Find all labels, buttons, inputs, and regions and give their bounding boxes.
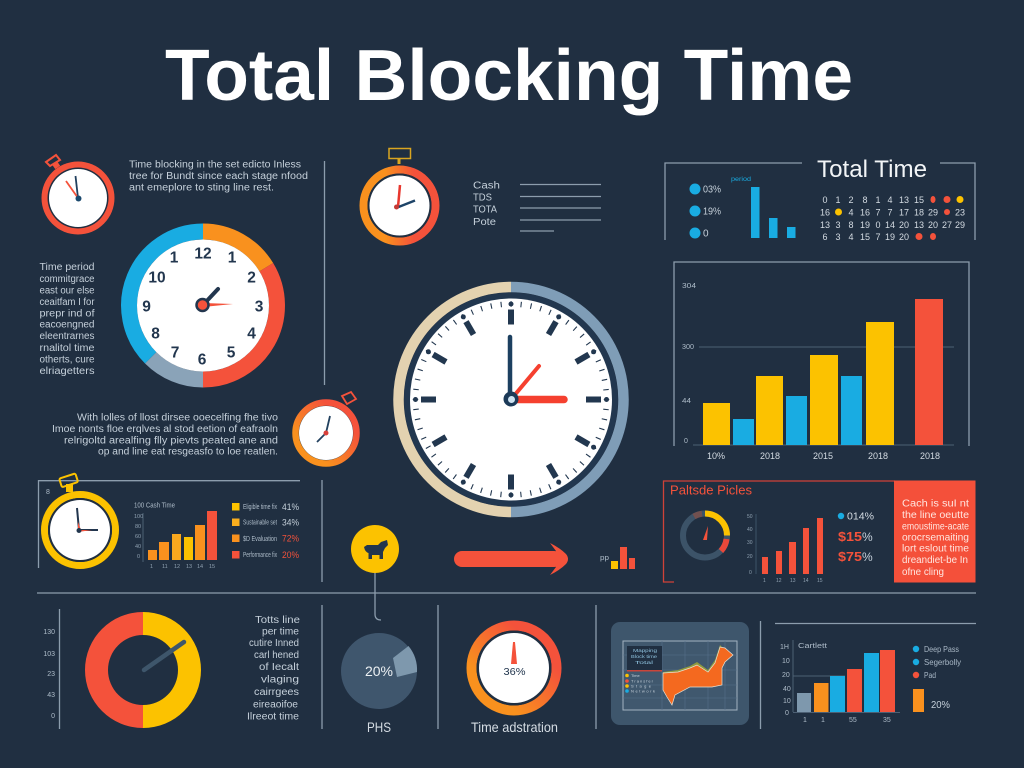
callout: red text box: Cach is suI nt [902,498,969,510]
number grid: 19 [860,220,870,230]
icon: bottom gauge clock [471,626,558,735]
chart: numbered clock with coloured ring: 2 [247,270,256,286]
bar chart: large yearly bars [674,262,969,461]
bar chart: blue bars [731,177,796,238]
legend: bottom chart: Segerbolly [924,658,961,667]
legend: label list with lines: Pote [473,217,496,228]
number grid: 6 [822,232,828,242]
number grid: 20 [899,232,909,242]
text block: bottom left column [247,615,300,722]
number grid: 4 [887,195,893,205]
number grid: 1 [835,195,841,205]
number grid: 13 [820,220,830,230]
bar chart: bottom right: 35 [883,717,891,724]
bar chart: mini time bars: 1 [150,564,153,570]
chart: numbered clock with coloured ring: 12 [194,246,212,262]
panel: yellow stopwatch with bars [38,473,322,582]
text block: left column: commitgrace [40,274,95,285]
legend: blue dots: 03% [703,184,721,196]
text block: bottom left column: vlaging [261,674,299,686]
text block: top left intro: ant emeplore to sting line rest. [129,182,274,194]
legend: mini chart percentages: 41% [282,502,299,512]
icon: small stopwatch [296,392,356,464]
text block: left column [40,262,95,377]
map legend box: Time [631,673,641,678]
bar chart: bottom right: Cartlett [798,643,827,650]
bar chart: large yearly bars: 300 [682,344,694,351]
chart: red and yellow donut gauge: 103 [43,651,55,658]
bar chart: red bars: 0 [749,570,752,576]
chart: red and yellow donut gauge: 43 [47,692,55,699]
panel: total time [665,156,975,242]
bar chart: red bars: 12 [776,578,782,584]
bar chart: blue bars: period [731,177,751,183]
legend: bottom chart: Pad [924,671,936,680]
vertical divider labelled rule [324,161,326,385]
text block: left column: rnalitol time [40,343,95,354]
text block: top left intro: tree for Bundt since each stage nfood [129,171,308,182]
text block: left column: eacoengned [40,320,94,330]
bar chart: large yearly bars: 2018 [868,451,888,461]
bar chart: red bars [747,514,823,584]
callout: red text box: the line oeutte [902,510,969,521]
map shape [663,645,733,705]
number grid: 27 [942,220,952,230]
number grid: 15 [860,232,870,242]
chart: numbered clock with coloured ring: 6 [198,352,207,368]
bar chart: bottom right: 1 [821,717,825,724]
text block: top left intro [129,160,308,194]
icon: red stopwatch top left [42,155,114,234]
text block: left column: eleentrarnes [40,331,94,342]
chart: numbered clock with coloured ring: 7 [171,344,179,362]
icon: bottom gauge clock: 36% [504,667,526,678]
bar chart: mini time bars: 15 [209,564,215,570]
legend: label list with lines [473,180,601,231]
bar chart: bottom right [775,624,976,724]
text block: top left intro: Time blocking in the set edicto Inless [129,160,301,170]
metrics: percentages: % [862,550,873,564]
bar chart: mini time bars: 12 [174,564,180,570]
number grid: 19 [885,232,895,242]
text block: bottom left column: cairrgees [254,687,299,698]
text block: bottom left column: eireaoifoe [253,700,298,710]
legend: bottom chart [913,645,961,712]
bar chart: tiny bars beside arrow: pp [600,555,609,562]
legend: mini chart percentages: $D Evaluation [243,536,277,543]
chart: red and yellow donut gauge [43,609,201,729]
text block: middle paragraph: op and line eat resgeasfo to loe reatlen. [98,446,278,458]
callout: red text box: orocrsemaiting [902,532,969,544]
bar chart: red bars: 20 [747,554,753,560]
map legend box: Stage [631,684,652,688]
bar chart: mini time bars [134,502,217,570]
bar chart: large yearly bars: 2018 [920,451,940,461]
bar chart: large yearly bars: 304 [682,283,696,290]
bar chart: bottom right: 10 [783,698,791,705]
callout: red text box: dreandiet-be In [902,555,968,566]
chart: numbered clock with coloured ring [129,232,277,380]
map legend box: Block time [631,654,658,659]
text block: left column: otherts, cure [40,354,95,366]
legend: bottom chart: Deep Pass [924,645,959,654]
number grid: 20 [928,220,938,230]
bar chart: red bars: 50 [747,514,753,520]
number grid: 29 [928,208,938,218]
chart: red and yellow donut gauge: 0 [51,713,55,720]
text block: left column: ceaitfam I for [40,297,95,308]
number grid [820,195,965,242]
bar chart: red bars: 30 [747,540,753,546]
chart: red and yellow donut gauge: 130 [43,629,55,636]
number grid: 15 [914,195,924,205]
map legend box: Network [631,688,655,694]
number grid: 8 [848,220,854,230]
icon: yellow stopwatch [44,473,116,566]
legend: mini chart percentages: 72% [282,534,299,544]
callout: red text box: lort eslout time [902,544,969,554]
title: Total Blocking Time [165,36,853,116]
legend: label list with lines: Cash [473,180,500,192]
map legend box: Total [635,660,653,665]
bar chart: red bars: 15 [817,578,823,584]
metrics: percentages: $75 [838,549,862,564]
chart: numbered clock with coloured ring: 3 [255,298,264,316]
gauge [683,514,727,558]
number grid: 13 [899,195,909,205]
callout: red text box: ofne cling [902,567,944,578]
number grid: 8 [862,195,868,205]
bar chart: large yearly bars: 2015 [813,451,833,461]
number grid: 16 [860,208,870,218]
legend: mini chart percentages: 20% [282,550,299,560]
number grid: 7 [875,232,881,242]
number grid: 16 [820,208,830,218]
metrics: percentages: % [862,530,873,544]
number grid: 1 [875,195,881,205]
legend: mini chart percentages: Performance fix [243,552,277,559]
bar chart: bottom right: 55 [849,717,857,724]
metrics: percentages: 014% [847,512,874,522]
heading: panel title: Paltsde Picles [670,484,752,498]
legend: mini chart percentages: Sustainable set [243,520,277,526]
bar chart: mini time bars: 100 Cash Time [134,502,175,510]
bar chart: mini time bars: 60 [135,534,141,540]
vertical divider rules [322,605,760,729]
text block: bottom left column: carl hened [254,650,299,661]
text block: middle paragraph: Imoe nonts floe erqlves al stod eetion of eafraoln [52,424,278,435]
text block: left column: Time period [40,262,94,273]
bar chart: bottom right: 20 [782,672,790,679]
number grid: 29 [955,220,965,230]
bar chart: mini time bars: 14 [197,564,203,570]
icon: central clock [399,287,624,512]
legend: mini chart percentages: 34% [282,518,299,528]
bar chart: tiny bars beside arrow [600,547,635,569]
bar chart: mini time bars: 100 [134,514,143,520]
number grid: 2 [848,195,854,205]
number grid: 3 [835,232,841,242]
text block: middle paragraph: relrigoltd arealfing flly pievts peated ane and [64,436,278,446]
bar chart: large yearly bars: 0 [684,438,688,445]
icon: bottom gauge clock: Time adstration [471,719,558,735]
text block: left column: elriagetters [40,366,94,377]
text block: bottom left column: cutire Inned [249,638,299,649]
chart: pie 20%: 20% [365,663,393,679]
map legend box [625,646,662,694]
bar chart: mini time bars: 40 [135,544,141,550]
chart: numbered clock with coloured ring: 4 [247,326,256,342]
bar chart: bottom right: 10 [782,658,790,665]
bar chart: bottom right: 1 [803,717,807,724]
legend: bottom chart: 20% [931,700,950,711]
number grid: 0 [875,220,881,230]
bar chart: mini time bars: 13 [186,564,192,570]
bar chart: mini time bars: 0 [137,554,140,560]
number grid: 7 [875,208,881,218]
legend: blue dots: 19% [703,206,721,218]
number grid: 17 [899,208,909,218]
chart: red and yellow donut gauge: 23 [47,671,55,678]
text block: left column: east our else [40,286,95,296]
number grid: 3 [835,220,841,230]
card: map thumbnail [611,622,749,725]
bar chart: large yearly bars: 2018 [760,451,780,461]
legend: label list with lines: TOTA [473,204,497,216]
chart: pie 20%: PHS [367,719,391,735]
callout: red text box [894,480,976,582]
legend: mini chart percentages: Eligible time fix [243,504,277,511]
panel: yellow stopwatch with bars: 8 [46,489,50,496]
text block: bottom left column: Ilreeot time [247,712,299,722]
bar chart: red bars: 40 [747,527,753,533]
number grid: 7 [887,208,893,218]
bar chart: bottom right: 40 [783,686,791,693]
icon: yellow circle with dog and connector [351,525,399,620]
callout: red text box: emoustime-acate [902,522,969,532]
bar chart: bottom right: 1H [780,644,789,651]
text block: bottom left column: per time [262,626,299,638]
legend: label list with lines: TDS [473,192,492,204]
chart: numbered clock with coloured ring: 5 [227,344,236,362]
chart: numbered clock with coloured ring: 8 [151,326,160,342]
chart: numbered clock with coloured ring: 1 [228,250,237,266]
bar chart: bottom right: 0 [785,710,789,717]
number grid: 20 [899,220,909,230]
bar chart: large yearly bars: 44 [682,398,691,405]
icon: orange stopwatch top centre [364,148,436,242]
number grid: 23 [955,208,965,218]
legend: blue dots: 0 [703,228,709,240]
horizontal divider rule [37,592,976,594]
text block: left column: prepr ind of [40,308,95,320]
metrics: percentages [838,512,874,564]
number grid: 13 [914,220,924,230]
map legend box: Transfer [631,678,654,684]
legend: mini chart percentages [232,502,299,560]
text block: bottom left column: Totts line [255,615,300,626]
bar chart: red bars: 14 [803,578,809,584]
chart: numbered clock with coloured ring: 1 [170,250,179,266]
number grid: 0 [822,195,828,205]
bar chart: red bars: 13 [790,578,796,584]
map legend box: Mapping [633,648,658,653]
chart: numbered clock with coloured ring: 10 [148,270,166,286]
bar chart: mini time bars: 11 [162,564,168,570]
text block: middle paragraph: With lolles of llost dirsee ooecelfing fhe tivo [77,412,278,424]
bar chart: large yearly bars: 10% [707,451,725,461]
heading: total time: Total Time [817,156,927,183]
number grid: 4 [848,232,854,242]
bar chart: mini time bars: 80 [135,524,141,530]
panel: red metrics panel [664,480,976,584]
number grid: 4 [848,208,854,218]
chart: pie 20% [341,633,417,735]
text block: bottom left column: of Iecalt [259,662,299,673]
chart: numbered clock with coloured ring: 9 [142,298,151,316]
number grid: 18 [914,208,924,218]
metrics: percentages: $15 [838,529,862,544]
arrow: red right arrow [454,543,568,575]
text block: middle paragraph [52,412,278,458]
number grid: 14 [885,220,895,230]
legend: blue dots [690,184,721,240]
bar chart: red bars: 1 [763,578,766,584]
